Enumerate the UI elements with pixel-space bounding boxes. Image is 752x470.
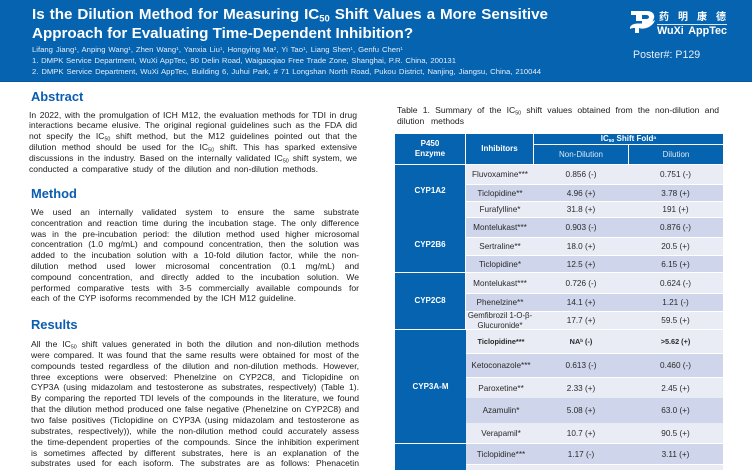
row: Azamulin: 5.08 (+) bbox=[567, 406, 595, 415]
row: Ticlopidine 1A2: Ticlopidine** bbox=[477, 188, 523, 198]
row: Ticlopidine 2B6 bbox=[466, 256, 723, 272]
authors and affiliations: Lifang Jiang1, Anping Wang1, Zhen Wang1, Yanxia Liu1, Hongying Ma2, Yi Tao1, Liang Shen1, Genfu Chen1 bbox=[32, 45, 403, 54]
authors and affiliations bbox=[32, 45, 541, 76]
text block: results body: the time-dependent properties of the compounds. Since the inhibition experiment bbox=[31, 437, 359, 447]
table caption: dilution methods bbox=[397, 116, 464, 126]
row: Ticlopidine 1A2 bbox=[466, 185, 723, 201]
text block: method body: compound concentration, and directly added to the incubation solution. We bbox=[31, 272, 359, 282]
text block: method body: concentration (1.0 mg/mL) and compound concentration, then the solution was bbox=[31, 239, 359, 249]
authors and affiliations: 2. DMPK Service Department, WuXi AppTec, Building 6, Juhui Park, # 71 Longshan North Road, Pukou District, Nanjing, Jiangsu, China, 210044 bbox=[32, 67, 541, 76]
row: Fluvoxamine: 0.856 (-) bbox=[566, 170, 596, 179]
text block: results body: that the dilution method produced one false negative (Phenelzine on CYP2C8) and bbox=[31, 404, 359, 414]
title: Approach for Evaluating Time-Dependent Inhibition? bbox=[32, 25, 413, 42]
text block: results body: All the IC50 shift values generated in both the dilution and non-dilution methods bbox=[31, 339, 359, 350]
panel: method bbox=[31, 186, 359, 303]
row: Montelukast 2C8: 0.624 (-) bbox=[660, 278, 691, 288]
authors and affiliations: 1. DMPK Service Department, WuXi AppTec, 90 Delin Road, Waigaoqiao Free Trade Zone, Shanghai, P.R. China, 200131 bbox=[32, 56, 456, 65]
text block: abstract body: conducted a comparative study of the dilution and non-dilution methods. bbox=[29, 164, 318, 174]
row: Sertraline: 18.0 (+) bbox=[567, 242, 595, 251]
enzyme: CYP1A2: CYP1A2 bbox=[414, 186, 446, 195]
row: Ketoconazole bbox=[466, 354, 723, 377]
poster number: Poster#: P129 bbox=[633, 49, 700, 61]
row: Phenelzine: Phenelzine** bbox=[477, 298, 523, 307]
enzyme: CYP2C8 bbox=[395, 273, 465, 329]
row: Montelukast 2B6: 0.903 (-) bbox=[566, 223, 596, 232]
row: Paroxetine: 2.33 (+) bbox=[567, 384, 595, 392]
text block: results body: substrates used for each isoform. The substrates are as follows: Phenacetin bbox=[31, 458, 359, 468]
text block: abstract body bbox=[29, 110, 357, 174]
text block: results body: were compared. It was found that the same results were obtained for most of the bbox=[31, 350, 359, 360]
header: P450 enzyme: P450 bbox=[421, 139, 439, 148]
row: Ticlopidine last group bbox=[466, 444, 723, 464]
header: non-dilution bbox=[534, 145, 628, 164]
logo wordmark bbox=[657, 8, 727, 36]
row: Sertraline bbox=[466, 238, 723, 255]
text block: results body: By comparing the reported TDI levels of the compounds in the literature, we found bbox=[31, 393, 359, 403]
row: Azamulin bbox=[466, 398, 723, 423]
row: Ticlopidine 3A-M: NAb (-) bbox=[570, 337, 592, 346]
row: Ticlopidine 3A-M bbox=[466, 330, 723, 353]
table caption: Table 1. Summary of the IC50 shift values obtained from the non-dilution and bbox=[397, 105, 719, 116]
row: Verapamil bbox=[466, 423, 723, 443]
header: IC50 shift fold: IC50 Shift Folda bbox=[601, 134, 656, 144]
row: Furafylline: Furafylline* bbox=[480, 205, 520, 214]
text block: results body: substrates, respectively)), while the non-dilution method could accurately assess bbox=[31, 426, 359, 436]
text block: method body: added to the incubation solution with a 10-fold dilution factor, while the non- bbox=[31, 250, 359, 260]
header: inhibitors: Inhibitors bbox=[481, 144, 518, 153]
enzyme: CYP2B6: CYP2B6 bbox=[414, 240, 446, 248]
row: Phenelzine: 14.1 (+) bbox=[567, 298, 595, 307]
row: Azamulin: 63.0 (+) bbox=[661, 406, 690, 415]
row: Montelukast 2B6: 0.876 (-) bbox=[660, 223, 691, 232]
header: inhibitors bbox=[466, 134, 533, 164]
title: Is the Dilution Method for Measuring IC50 Shift Values a More Sensitive bbox=[32, 6, 548, 23]
row: Azamulin: Azamulin* bbox=[483, 406, 519, 415]
row: Furafylline: 191 (+) bbox=[662, 205, 689, 214]
row: Sertraline: Sertraline** bbox=[479, 242, 521, 251]
row: Fluvoxamine: Fluvoxamine*** bbox=[472, 170, 528, 179]
text block: abstract body: discussions in the industry. Based on the internally validated IC50 shift system, we bbox=[29, 153, 357, 164]
row: Paroxetine: 2.45 (+) bbox=[661, 384, 690, 392]
row: Ketoconazole: Ketoconazole*** bbox=[471, 361, 531, 370]
text block: method body: performed comparative tests with 3-5 commercially available compounds for bbox=[31, 283, 359, 293]
header: IC50 shift fold bbox=[534, 134, 723, 144]
row: Ticlopidine last group: 3.11 (+) bbox=[662, 450, 689, 458]
row: Paroxetine bbox=[466, 378, 723, 398]
row: Ticlopidine 2B6: 6.15 (+) bbox=[661, 260, 690, 268]
row: Furafylline: 31.8 (+) bbox=[567, 205, 595, 214]
row: Paroxetine: Paroxetine** bbox=[478, 384, 524, 392]
row: Gemfibrozil: 17.7 (+) bbox=[567, 316, 595, 325]
row: Gemfibrozil: 59.5 (+) bbox=[661, 316, 690, 325]
row: Fluvoxamine bbox=[466, 165, 723, 184]
enzyme: CYP1A2 bbox=[395, 165, 465, 217]
enzyme: CYP2B6 bbox=[395, 217, 465, 272]
row: Ticlopidine last group: 1.17 (-) bbox=[568, 450, 594, 458]
heading: method: Method bbox=[31, 186, 77, 201]
header: non-dilution: Non-Dilution bbox=[559, 150, 603, 158]
row: cut-off row bbox=[466, 465, 723, 470]
text block: results body: compounds tested regardless of the dilution and non-dilution methods. However, bbox=[31, 361, 359, 371]
text block: abstract body: interactions became elusive. The original regional guidelines such as the FDA did bbox=[29, 120, 357, 130]
text block: method body bbox=[31, 207, 359, 303]
row: Gemfibrozil bbox=[466, 312, 723, 329]
header: P450 enzyme bbox=[395, 134, 465, 164]
row: Montelukast 2C8 bbox=[466, 273, 723, 293]
table header bbox=[395, 134, 723, 164]
logo wordmark: WuXi AppTec bbox=[657, 24, 727, 36]
row: Montelukast 2B6 bbox=[466, 218, 723, 237]
row: Montelukast 2C8: 0.726 (-) bbox=[566, 278, 596, 288]
row: Phenelzine bbox=[466, 294, 723, 311]
heading: abstract: Abstract bbox=[31, 89, 83, 104]
enzyme: next group bbox=[395, 444, 466, 470]
text block: method body: concentration and reaction time during the incubation stage. The only difference bbox=[31, 218, 359, 228]
row: Ticlopidine 2B6: 12.5 (+) bbox=[567, 260, 595, 268]
enzyme: CYP2C8: CYP2C8 bbox=[414, 296, 446, 305]
row: Fluvoxamine: 0.751 (-) bbox=[660, 170, 691, 179]
row: Verapamil: 10.7 (+) bbox=[567, 428, 595, 438]
row: Sertraline: 20.5 (+) bbox=[661, 242, 690, 251]
row: Verapamil: Verapamil* bbox=[481, 428, 521, 438]
heading: results: Results bbox=[31, 317, 78, 332]
text block: results body: CYP3A (using midazolam and testosterone as substrates, respectively) (Table 1). bbox=[31, 382, 359, 392]
text block: method body: each of the CYP isoforms recommended by the ICH M12 guideline. bbox=[31, 293, 296, 303]
enzyme: CYP3A-M bbox=[395, 330, 466, 443]
text block: abstract body: not specify the IC50 shift method, but the M12 guidelines pointed out that the bbox=[29, 131, 357, 142]
text block: results body: is sometimes affected by different substrates, here is an explanation of the bbox=[31, 448, 359, 458]
row: Montelukast 2B6: Montelukast*** bbox=[473, 223, 527, 232]
row: Furafylline bbox=[466, 202, 723, 217]
text block: abstract body: dilution method should be used for the IC50 shift. This has sparked extensive bbox=[29, 142, 357, 153]
row: Ticlopidine 3A-M: >5.62 (+) bbox=[661, 337, 690, 346]
text block: results body: two false positives (Ticlopidine on CYP3A (using midazolam and testosterone as bbox=[31, 415, 359, 425]
row: Gemfibrozil: Glucuronide* bbox=[477, 320, 523, 330]
row: Ticlopidine last group: Ticlopidine*** bbox=[477, 450, 525, 458]
header: dilution bbox=[629, 145, 723, 164]
row: Ketoconazole: 0.460 (-) bbox=[660, 361, 691, 370]
panel: abstract bbox=[29, 89, 357, 174]
table caption bbox=[397, 105, 719, 126]
text block: method body: We used an internally validated system to ensure the same substrate bbox=[31, 207, 359, 217]
logo wordmark: 药 明 康 德 bbox=[659, 8, 726, 23]
table: IC50 shift summary bbox=[395, 134, 723, 470]
text block: results body bbox=[31, 339, 359, 468]
row: Montelukast 2C8: Montelukast*** bbox=[473, 278, 527, 288]
text block: abstract body: In 2022, with the promulgation of ICH M12, the evaluation methods for TDI in drug bbox=[29, 110, 357, 120]
row: Ticlopidine 2B6: Ticlopidine* bbox=[479, 260, 521, 268]
row: Phenelzine: 1.21 (-) bbox=[662, 298, 689, 307]
title bbox=[32, 6, 548, 42]
header: P450 enzyme: Enzyme bbox=[415, 149, 445, 158]
row: Ketoconazole: 0.613 (-) bbox=[566, 361, 596, 370]
text block: method body: was in the pre-incubation period: the dilution method used higher microsomal bbox=[31, 229, 359, 239]
text block: method body: dilution method used lower microsomal concentration (0.1 mg/mL) and bbox=[31, 261, 359, 271]
text block: results body: three exceptions were observed: Phenelzine on CYP2C8, and Ticlopidine on bbox=[31, 372, 359, 382]
row: Ticlopidine 1A2: 4.96 (+) bbox=[567, 188, 595, 198]
header: dilution: Dilution bbox=[663, 150, 689, 158]
row: Ticlopidine 1A2: 3.78 (+) bbox=[661, 188, 690, 198]
enzyme: CYP3A-M: CYP3A-M bbox=[412, 382, 448, 390]
header banner bbox=[0, 0, 752, 82]
row: Gemfibrozil: Gemfibrozil 1-O-β- bbox=[468, 311, 532, 320]
row: Ticlopidine 3A-M: Ticlopidine*** bbox=[478, 337, 524, 346]
row: Verapamil: 90.5 (+) bbox=[661, 428, 690, 438]
panel: results bbox=[31, 317, 359, 468]
icon: WuXi AppTec logo mark bbox=[630, 11, 655, 33]
